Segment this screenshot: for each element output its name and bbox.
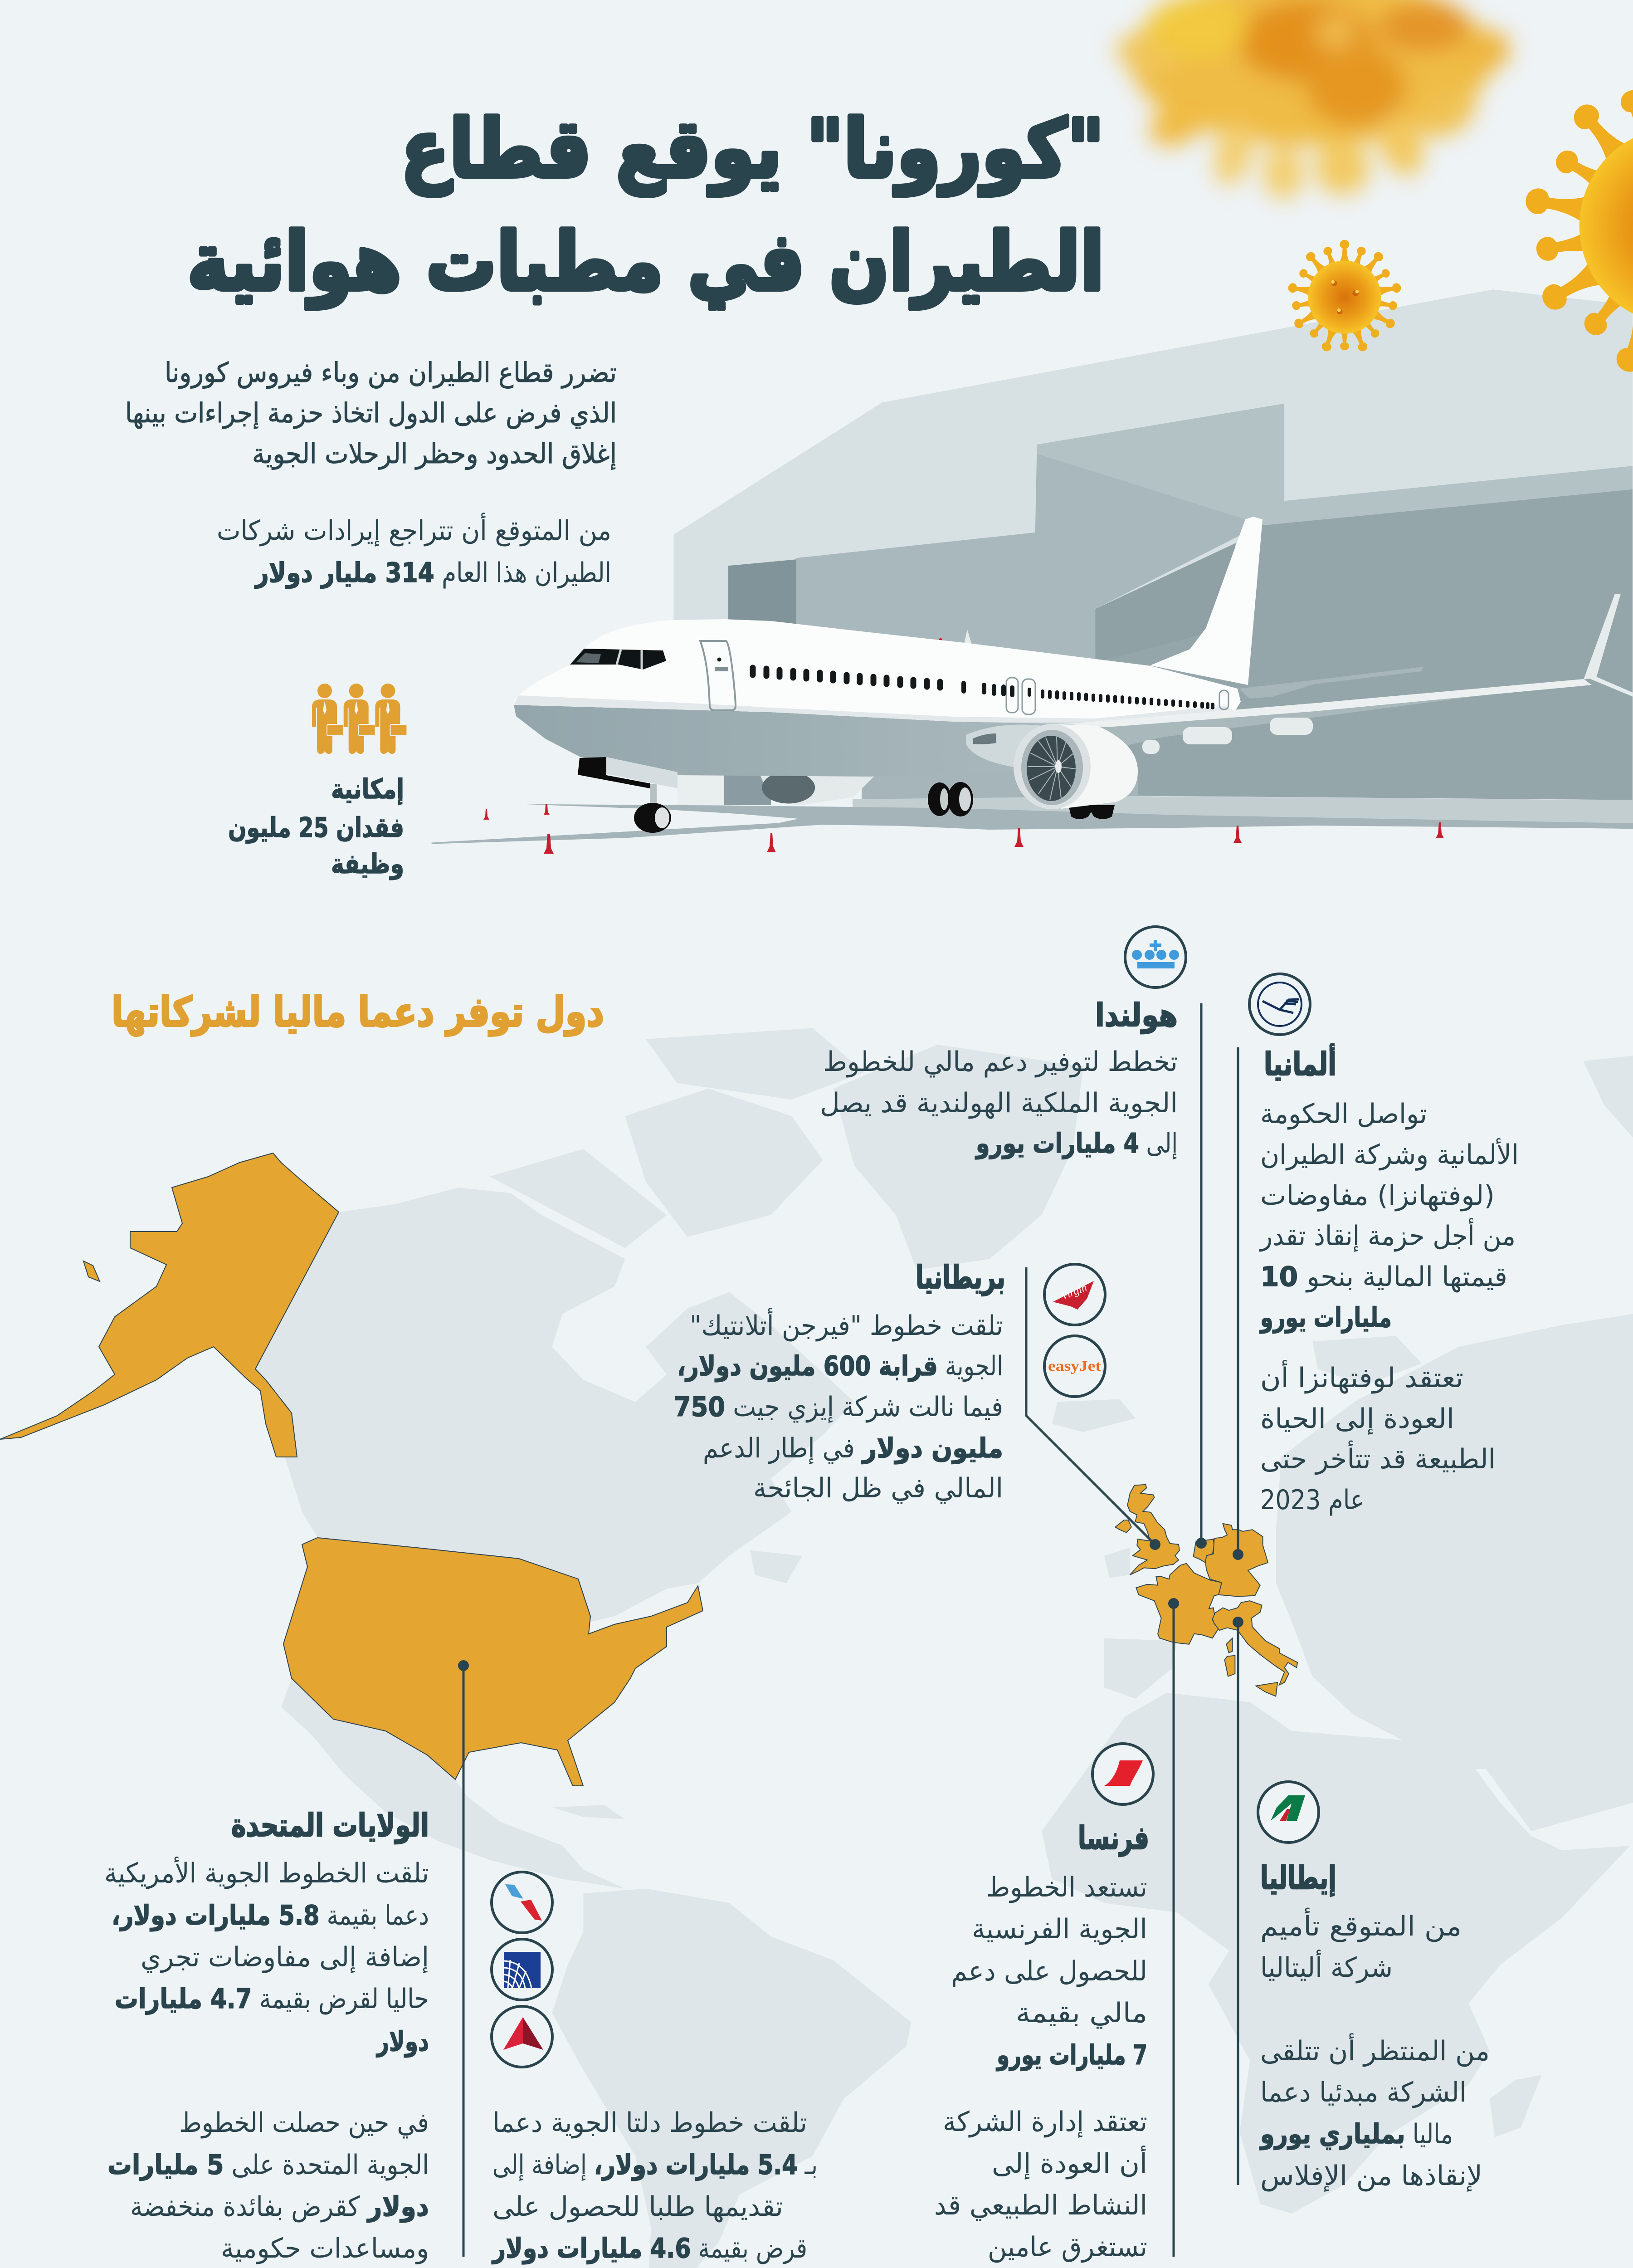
map: Italy bbox=[1213, 1601, 1297, 1696]
panel: Netherlands: الجوية الملكية الهولندية قد يصل bbox=[820, 1087, 1178, 1119]
panel: Germany: من أجل حزمة إنقاذ تقدر bbox=[1259, 1218, 1516, 1252]
panel: Netherlands bbox=[820, 997, 1178, 1159]
intro text: الذي فرض على الدول اتخاذ حزمة إجراءات بينها bbox=[125, 397, 617, 429]
leader lines and dots bbox=[458, 1003, 1243, 2257]
panel: France: تستغرق عامين bbox=[988, 2231, 1147, 2263]
icon: Lufthansa bbox=[1249, 974, 1310, 1035]
icon: Air France bbox=[1092, 1744, 1153, 1804]
panel: United States: دعما بقيمة 5.8 مليارات دولار، bbox=[112, 1900, 429, 1931]
panel: France: تستعد الخطوط bbox=[986, 1872, 1147, 1903]
map: European countries bbox=[1115, 1485, 1297, 1696]
panel: Britain: المالي في ظل الجائحة bbox=[753, 1472, 1003, 1504]
panel: Italy: ماليا بملياري يورو bbox=[1259, 2118, 1453, 2150]
map: Germany bbox=[1205, 1524, 1268, 1597]
panel: France: أن العودة إلى bbox=[992, 2146, 1147, 2180]
job losses text: إمكانية bbox=[331, 773, 404, 805]
map: France bbox=[1136, 1564, 1222, 1644]
plane: engine pylon bbox=[966, 725, 1043, 769]
plane: mid and rear doors bbox=[1006, 678, 1228, 714]
icon: KLM bbox=[1125, 927, 1186, 987]
plane: right wing gear bbox=[1068, 805, 1115, 819]
panel: Italy: من المتوقع تأميم bbox=[1260, 1907, 1462, 1942]
panel: United States: الجوية المتحدة على 5 مليارات bbox=[107, 2149, 429, 2181]
panel: United States: تلقت الخطوط الجوية الأمريكية bbox=[104, 1857, 429, 1889]
panel: Italy: من المنتظر أن تتلقى bbox=[1260, 2033, 1490, 2067]
icon: United Airlines bbox=[492, 1939, 552, 2000]
panel: Britain bbox=[674, 1259, 1005, 1504]
panel: Germany: الطبيعة قد تتأخر حتى bbox=[1260, 1440, 1496, 1475]
panel: Netherlands: إلى 4 مليارات يورو bbox=[975, 1128, 1178, 1159]
panel: Italy: الشركة مبدئيا دعما bbox=[1260, 2077, 1467, 2108]
panel: Britain: مليون دولار في إطار الدعم bbox=[703, 1432, 1003, 1464]
virus: large blurred bbox=[1112, 0, 1510, 200]
panel: France: مالي بقيمة bbox=[1016, 1997, 1147, 2029]
panel: France bbox=[934, 1819, 1149, 2263]
plane: main landing gear bbox=[928, 782, 973, 816]
map: Alaska bbox=[0, 1153, 339, 1457]
intro text bbox=[125, 357, 617, 470]
job losses text bbox=[228, 773, 404, 880]
map: Northern Ireland bbox=[1115, 1520, 1131, 1533]
panel: Delta text bbox=[491, 2107, 818, 2264]
icon: Virgin Atlantic: Virgin bbox=[1060, 1281, 1089, 1303]
virus: medium bbox=[1287, 240, 1402, 353]
intro text: إغلاق الحدود وحظر الرحلات الجوية bbox=[252, 438, 617, 470]
icon: American Airlines bbox=[492, 1872, 552, 1933]
runway markers bbox=[483, 804, 1444, 854]
panel: United States: حاليا لقرض بقيمة 4.7 مليارات bbox=[115, 1983, 429, 2015]
plane: nose gear bbox=[578, 757, 678, 833]
intro text: تضرر قطاع الطيران من وباء فيروس كورونا bbox=[165, 357, 617, 389]
panel: Germany: ألمانيا bbox=[1264, 1043, 1336, 1083]
panel: Italy: إيطاليا bbox=[1260, 1859, 1336, 1897]
plane: far winglet bbox=[939, 630, 972, 645]
virus: right edge bbox=[1523, 72, 1633, 376]
panel: Germany: الألمانية وشركة الطيران bbox=[1260, 1138, 1519, 1171]
panel: Delta text: بـ 5.4 مليارات دولار، إضافة إلى bbox=[492, 2149, 818, 2181]
map: United Kingdom bbox=[1127, 1485, 1180, 1575]
icon: Alitalia bbox=[1258, 1782, 1319, 1843]
icon: Virgin Atlantic bbox=[1044, 1264, 1105, 1325]
panel: Germany: تواصل الحكومة bbox=[1260, 1098, 1427, 1130]
plane: wing bbox=[1064, 594, 1633, 754]
panel: Britain: تلقت خطوط "فيرجن أتلانتيك" bbox=[690, 1308, 1003, 1342]
panel: Italy: شركة أليتاليا bbox=[1260, 1950, 1393, 1984]
map: United States bbox=[283, 1538, 703, 1786]
title: الطيران في مطبات هوائية bbox=[187, 215, 1104, 309]
panel: Britain: بريطانيا bbox=[916, 1259, 1005, 1296]
panel: Germany bbox=[1259, 1043, 1519, 1516]
panel: United States: في حين حصلت الخطوط bbox=[179, 2107, 429, 2139]
panel: United States: دولار bbox=[376, 2026, 429, 2058]
panel: France: فرنسا bbox=[1078, 1819, 1149, 1857]
panel: Germany: العودة إلى الحياة bbox=[1260, 1403, 1454, 1435]
panel: United States: إضافة إلى مفاوضات تجري bbox=[141, 1941, 429, 1973]
plane: front door bbox=[700, 641, 736, 710]
panel: Britain: الجوية قرابة 600 مليون دولار، bbox=[677, 1350, 1003, 1382]
panel: United States: الولايات المتحدة bbox=[231, 1807, 429, 1844]
panel: Germany: عام 2023 bbox=[1260, 1484, 1365, 1516]
panel: France: الجوية الفرنسية bbox=[972, 1913, 1147, 1945]
panel: United States: دولار كقرض بفائدة منخفضة bbox=[130, 2191, 429, 2223]
hangar building bbox=[673, 289, 1633, 823]
panel: Germany: (لوفتهانزا) مفاوضات bbox=[1260, 1180, 1495, 1212]
icon: Delta bbox=[492, 2006, 552, 2067]
title: "كورونا" يوقع قطاع bbox=[401, 103, 1104, 196]
plane: tail fin bbox=[1150, 517, 1263, 685]
job losses text: فقدان 25 مليون bbox=[228, 812, 404, 844]
panel: Britain: فيما نالت شركة إيزي جيت 750 bbox=[674, 1391, 1003, 1423]
icon: workers bbox=[312, 684, 407, 754]
panel: France: 7 مليارات يورو bbox=[996, 2039, 1147, 2071]
section heading: دول توفر دعما ماليا لشركاتها bbox=[112, 988, 604, 1036]
panel: Germany: قيمتها المالية بنحو 10 bbox=[1260, 1261, 1507, 1293]
panel: Delta text: قرض بقيمة 4.6 مليارات دولار bbox=[491, 2233, 807, 2264]
floor shadow bbox=[432, 804, 1633, 844]
revenue text: من المتوقع أن تتراجع إيرادات شركات bbox=[217, 513, 611, 547]
icon: easyJet: easyJet bbox=[1048, 1358, 1101, 1374]
panel: Netherlands: تخطط لتوفير دعم مالي للخطوط bbox=[823, 1046, 1178, 1078]
panel: United States bbox=[104, 1807, 429, 2264]
airplane bbox=[514, 517, 1633, 833]
plane: horizontal stabilizer bbox=[1239, 667, 1423, 699]
panel: Delta text: تقديمها طلبا للحصول على bbox=[492, 2191, 783, 2223]
panel: United States: ومساعدات حكومية bbox=[221, 2233, 429, 2264]
panel: France: تعتقد إدارة الشركة bbox=[943, 2106, 1147, 2138]
panel: Delta text: تلقت خطوط دلتا الجوية دعما bbox=[492, 2107, 807, 2139]
plane: fuselage bbox=[514, 619, 1241, 722]
plane: near engine bbox=[1014, 724, 1138, 809]
plane: cabin windows bbox=[753, 668, 1213, 708]
plane: lower fuselage shading bbox=[514, 695, 1235, 722]
panel: Italy: لإنقاذها من الإفلاس bbox=[1260, 2160, 1482, 2192]
map: Netherlands bbox=[1194, 1539, 1214, 1563]
icon: easyJet bbox=[1044, 1336, 1105, 1397]
panel: France: للحصول على دعم bbox=[951, 1955, 1147, 1987]
panel: Netherlands: هولندا bbox=[1095, 997, 1178, 1034]
revenue text bbox=[217, 513, 611, 589]
world map background bbox=[255, 1028, 1633, 2268]
plane: cockpit windows bbox=[570, 649, 666, 670]
panel: Germany: مليارات يورو bbox=[1259, 1302, 1392, 1334]
job losses text: وظيفة bbox=[331, 848, 404, 880]
plane: box under fuselage bbox=[678, 771, 771, 805]
plane: far engine bbox=[760, 772, 877, 806]
plane: belly bbox=[514, 705, 1236, 777]
title bbox=[187, 103, 1104, 309]
revenue text: الطيران هذا العام 314 مليار دولار bbox=[254, 557, 611, 589]
panel: Germany: تعتقد لوفتهانزا أن bbox=[1260, 1360, 1463, 1394]
panel: Italy bbox=[1259, 1859, 1490, 2192]
panel: France: النشاط الطبيعي قد bbox=[934, 2190, 1147, 2221]
